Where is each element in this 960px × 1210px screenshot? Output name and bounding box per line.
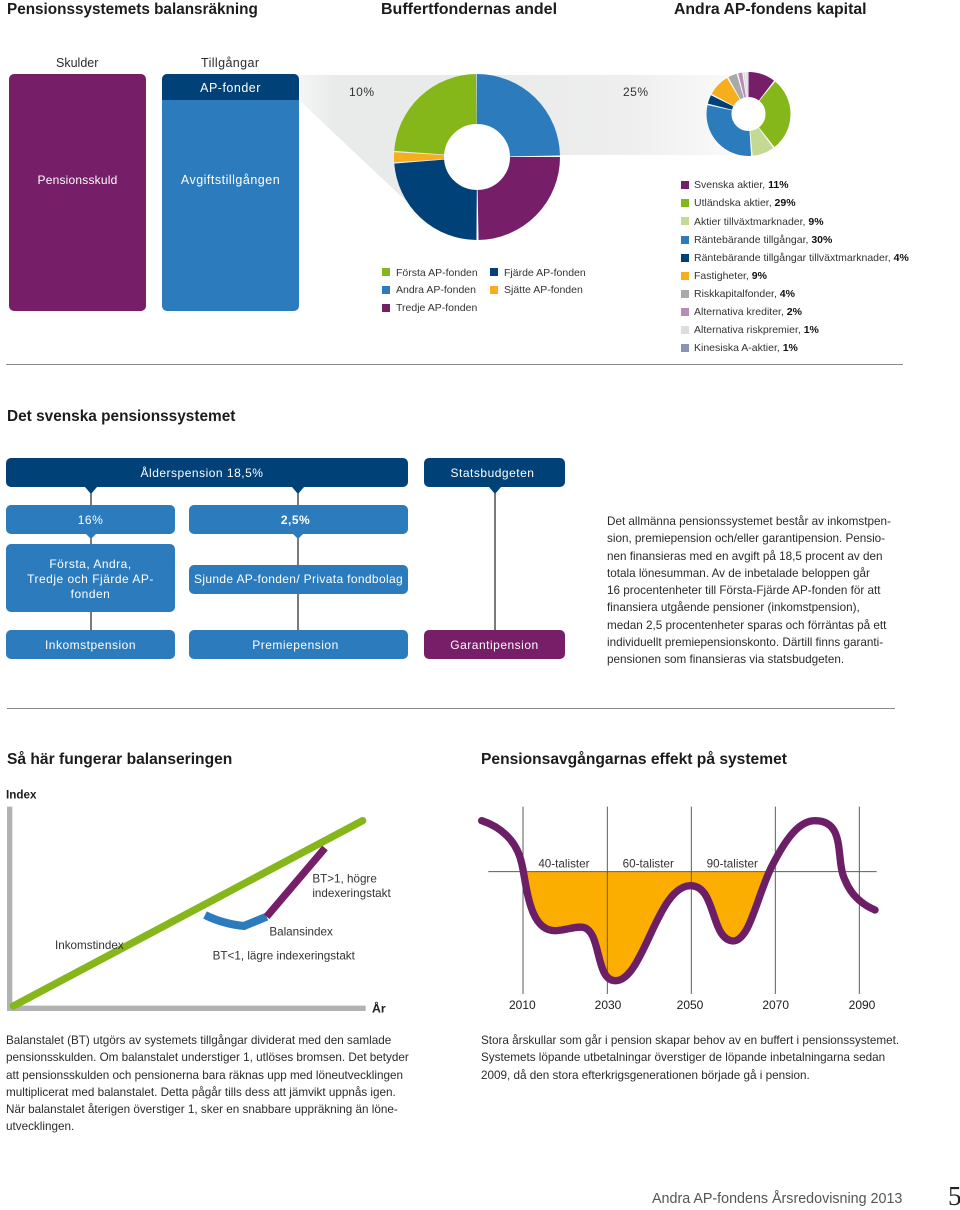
heading: Så här fungerar balanseringen: Så här fungerar balanseringen — [7, 751, 232, 768]
legend: asset classes: Kinesiska A-aktier, 1% — [694, 342, 798, 354]
connectors — [85, 487, 501, 630]
text block: pension system description: individuellt premiepensionskonto. Därtill finns garanti- — [607, 636, 883, 649]
text block: pension system description — [607, 515, 891, 666]
line: BT over 1 — [267, 848, 325, 917]
heading: Pensionssystemets balansräkning: Pensionssystemets balansräkning — [7, 1, 258, 18]
bar: Pensionsskuld: Pensionsskuld — [38, 173, 117, 187]
text block: pension system description: sion, premiepension och/eller garantipension. Pensio- — [607, 532, 885, 545]
legend: asset classes: Utländska aktier, 29% — [694, 197, 796, 209]
box: Garantipension — [424, 630, 565, 659]
text block: retirement explanation — [481, 1034, 899, 1082]
box: Statsbudgeten — [424, 458, 565, 487]
chart: fund donuts with connecting bands — [300, 72, 790, 240]
text block: balancing explanation: multiplicerat med balanstalet. Detta pågår tills dess att jämvikt uppnås igen. — [6, 1086, 396, 1099]
axis labels: 2030 — [595, 998, 622, 1012]
label: År: År — [372, 1001, 386, 1016]
label: BT under 1: BT<1, lägre indexeringstakt — [213, 949, 356, 962]
box: 2,5%: 2,5% — [281, 513, 310, 527]
box: Inkomstpension — [6, 630, 175, 659]
line: Inkomstindex — [13, 821, 363, 1006]
bar: Avgiftstillgången — [162, 74, 299, 311]
box: Första, Andra, Tredje och Fjärde AP-fonden: Tredje och Fjärde AP- — [27, 572, 154, 586]
label: Inkomstindex: Inkomstindex — [55, 939, 124, 952]
box: Premiepension: Premiepension — [252, 638, 339, 652]
box: Sjunde AP-fonden / Privata fondbolag — [189, 565, 408, 594]
legend: asset classes: Aktier tillväxtmarknader, 9% — [694, 216, 824, 228]
box: Premiepension — [189, 630, 408, 659]
diagram: pension system flow — [6, 458, 565, 659]
chart: balancing index — [6, 789, 391, 1016]
donut: Buffertfonderna — [419, 99, 535, 215]
text block: retirement explanation: 2009, då den stora efterkrigsgenerationen började gå i pension. — [481, 1069, 810, 1082]
box: Statsbudgeten: Statsbudgeten — [451, 466, 534, 480]
box: Första, Andra, Tredje och Fjärde AP-fonden — [6, 544, 175, 612]
label: BT over 1: BT>1, högre — [312, 872, 377, 885]
box: Första, Andra, Tredje och Fjärde AP-fonden: Första, Andra, — [49, 556, 132, 570]
bar: Pensionsskuld — [9, 74, 146, 311]
band: 10% wedge — [300, 75, 478, 200]
box: 16% — [6, 505, 175, 534]
bar: Avgiftstillgången: Avgiftstillgången — [181, 173, 280, 187]
text block: balancing explanation: När balanstalet återigen överstiger 1, sker en snabbare uppräkning än löne- — [6, 1103, 398, 1116]
label: 40-talister: 40-talister — [538, 858, 590, 871]
label: 10%: 10% — [349, 85, 375, 99]
footer: report title: Andra AP-fondens Årsredovisning 2013 — [652, 1191, 902, 1207]
axes — [10, 807, 366, 1008]
text block: pension system description: finansiera utgående pensioner (inkomstpension), — [607, 601, 860, 614]
chart: retirement effect — [478, 806, 879, 1012]
text block: retirement explanation: Systemets löpande utbetalningar överstiger de löpande inbetalningarna sedan — [481, 1051, 885, 1064]
axis labels: 2090 — [849, 998, 876, 1012]
label: 25%: 25% — [623, 85, 649, 99]
curve — [482, 821, 875, 981]
box: 16%: 16% — [78, 513, 103, 527]
band: 25% wedge — [478, 75, 748, 155]
label: Skulder: Skulder — [56, 56, 98, 70]
box: Garantipension: Garantipension — [450, 638, 539, 652]
axis labels — [509, 998, 876, 1012]
panel: balance sheet — [9, 56, 299, 311]
label: BT over 1: indexeringstakt — [312, 887, 391, 900]
legend: AP-fonder: Första AP-fonden — [396, 267, 478, 279]
bar segment: AP-fonder — [162, 74, 299, 100]
legend: asset classes: Alternativa riskpremier, 1% — [694, 324, 819, 336]
heading: Pensionsavgångarnas effekt på systemet: Pensionsavgångarnas effekt på systemet — [481, 751, 787, 768]
legend: asset classes: Räntebärande tillgångar, 30% — [694, 234, 832, 246]
box: Inkomstpension: Inkomstpension — [45, 638, 136, 652]
legend: AP-fonder: Andra AP-fonden — [396, 284, 476, 296]
box: Första, Andra, Tredje och Fjärde AP-fonden: fonden — [71, 586, 110, 600]
legend: asset classes: Fastigheter, 9% — [694, 270, 767, 282]
legend: asset classes: Svenska aktier, 11% — [694, 179, 789, 191]
text block: pension system description: Det allmänna pensionssystemet består av inkomstpen- — [607, 515, 891, 528]
text block: balancing explanation — [6, 1034, 409, 1133]
bar segment: AP-fonder: AP-fonder — [200, 81, 261, 95]
legend: AP-fonder: Tredje AP-fonden — [396, 302, 477, 314]
legend: AP-fonder — [382, 267, 586, 314]
box: Sjunde AP-fonden / Privata fondbolag: Sjunde AP-fonden/ Privata fondbolag — [194, 572, 403, 586]
axis labels: 2070 — [762, 998, 789, 1012]
label: Balansindex: Balansindex — [269, 925, 333, 938]
text block: pension system description: totala lönesumman. Av de inbetalade beloppen går — [607, 567, 870, 580]
text block: balancing explanation: Balanstalet (BT) utgörs av systemets tillgångar dividerat med den samlade — [6, 1034, 391, 1047]
label: Tillgångar: Tillgångar — [201, 56, 259, 70]
text block: pension system description: medan 2,5 procentenheter sparas och förräntas på ett — [607, 619, 886, 632]
heading: Det svenska pensionssystemet: Det svenska pensionssystemet — [7, 408, 235, 425]
legend: AP-fonder: Sjätte AP-fonden — [504, 284, 583, 296]
legend: AP-fonder: Fjärde AP-fonden — [504, 267, 586, 279]
text block: pension system description: 16 procentenheter till Första-Fjärde AP-fonden för att — [607, 584, 881, 597]
box: 2,5% — [189, 505, 408, 534]
heading: Buffertfondernas andel: Buffertfondernas andel — [381, 1, 557, 18]
text block: balancing explanation: att pensionsskulden och pensionerna bara räknas upp med löneutvecklingen — [6, 1069, 403, 1082]
label: Index: Index — [6, 789, 37, 802]
text block: retirement explanation: Stora årskullar som går i pension skapar behov av en buffert i pensionssystemet. — [481, 1034, 899, 1047]
label: 90-talister: 90-talister — [707, 858, 758, 871]
grid lines — [488, 807, 877, 994]
legend: asset classes — [681, 179, 909, 354]
donut: Andra AP-fondens kapital — [719, 84, 778, 144]
line: Balansindex below — [205, 915, 267, 926]
legend: asset classes: Räntebärande tillgångar tillväxtmarknader, 4% — [694, 252, 909, 264]
label: 60-talister: 60-talister — [623, 858, 674, 871]
box: Ålderspension — [6, 458, 408, 487]
text block: pension system description: pensionen som finansieras via statsbudgeten. — [607, 653, 844, 666]
axis labels: 2050 — [677, 998, 704, 1012]
legend: asset classes: Alternativa krediter, 2% — [694, 306, 802, 318]
axis labels: 2010 — [509, 998, 536, 1012]
text block: balancing explanation: utvecklingen. — [6, 1120, 74, 1133]
text block: balancing explanation: pensionsskulden. Om balanstalet understiger 1, utlöses bromsen. Det betyder — [6, 1051, 409, 1064]
box: Ålderspension: Ålderspension 18,5% — [141, 466, 263, 480]
text block: pension system description: nen finansieras med en avgift på 18,5 procent av den — [607, 550, 882, 563]
deficit area — [525, 872, 768, 981]
heading: Andra AP-fondens kapital: Andra AP-fondens kapital — [674, 1, 867, 18]
legend: asset classes: Riskkapitalfonder, 4% — [694, 288, 795, 300]
